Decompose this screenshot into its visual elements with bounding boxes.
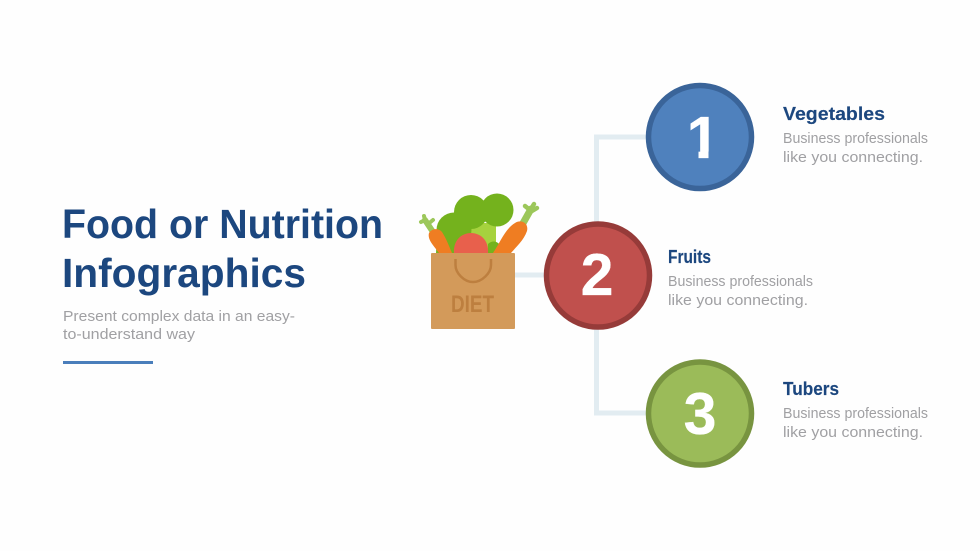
text block: vegetables: Vegetables: [783, 103, 885, 124]
subtitle: to-understand way: [63, 327, 196, 343]
text block: tubers: Business professionals: [783, 406, 928, 422]
text block: tubers: like you connecting.: [783, 425, 923, 441]
right carrot: [493, 204, 537, 253]
icon: diet bag with vegetables: [421, 194, 537, 329]
shopping bag: [431, 253, 515, 329]
circle 2: 2: [581, 242, 613, 308]
circle 1: 1: [687, 105, 719, 171]
title: Food or Nutrition: [62, 201, 383, 247]
text block: vegetables: like you connecting.: [783, 150, 923, 166]
connector lines: [515, 137, 646, 413]
bag handle: [456, 259, 491, 282]
circle 2: [546, 224, 650, 327]
title: Infographics: [62, 250, 306, 296]
circle 1: [648, 86, 752, 188]
text block: fruits: [668, 246, 813, 309]
tomato: [454, 233, 488, 253]
broccoli: [436, 194, 514, 253]
text block: tubers: [783, 378, 928, 441]
left carrot: [421, 216, 452, 253]
text block: fruits: Fruits: [668, 246, 711, 267]
title: [62, 201, 383, 296]
subtitle: [63, 309, 295, 343]
title accent line: [63, 361, 153, 364]
circle 3: [648, 362, 752, 465]
text block: vegetables: Business professionals: [783, 131, 928, 147]
text block: fruits: like you connecting.: [668, 293, 808, 309]
text block: tubers: Tubers: [783, 378, 839, 399]
bag label: DIET: [451, 291, 494, 318]
text block: fruits: Business professionals: [668, 274, 813, 290]
subtitle: Present complex data in an easy-: [63, 309, 295, 325]
circle 3: 3: [684, 381, 716, 447]
text block: vegetables: [783, 103, 928, 166]
